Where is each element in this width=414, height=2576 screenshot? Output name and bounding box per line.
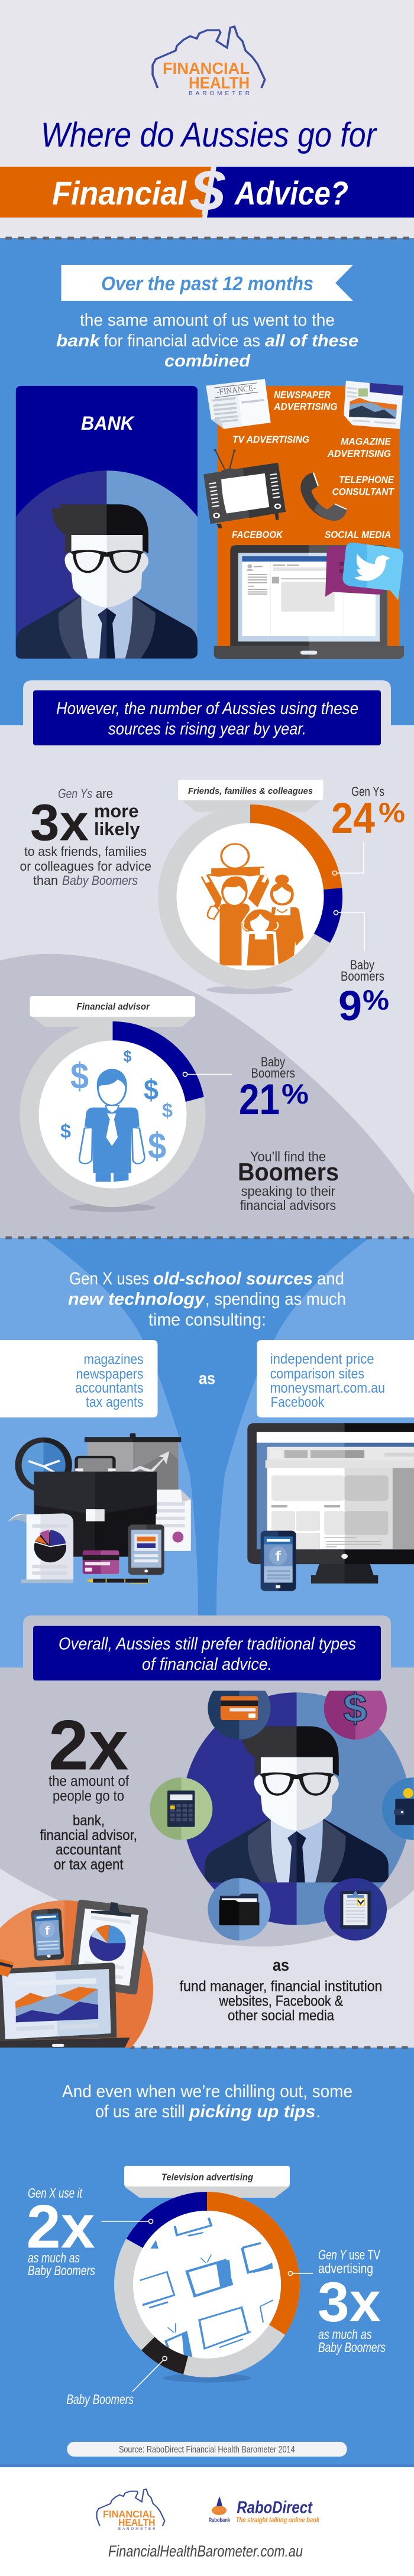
text: Gen X statement: new technology (68, 1290, 205, 1309)
ribbon: over the past 12 months: Over the past 12 months (101, 272, 313, 294)
text: 2x traditional sources: people go to (53, 1787, 124, 1804)
text: Gen Ys 3x more likely: more (94, 801, 138, 822)
label: Baby Boomers 21 percent (183, 1055, 309, 1124)
icon: advisor with dollar signs: $ (144, 1075, 159, 1106)
label: Baby Boomers 9 percent: 9 (338, 983, 362, 1030)
text: Gen X statement: and (317, 1269, 344, 1289)
label: Gen Y 3x: Baby Boomers (318, 2340, 386, 2355)
icon: advisor with dollar signs (60, 1047, 173, 1182)
panel: new technology sources list: Facebook (271, 1394, 325, 1410)
label: Gen Ys 24 percent: % (379, 797, 405, 828)
footer logo: RaboDirect: Rabobank (209, 2517, 230, 2524)
text: 2x traditional sources: or tax agent (54, 1856, 124, 1873)
text: same amount statement: the same amount of us went to the (80, 311, 335, 330)
panel: bank: BANK (81, 413, 135, 434)
text: Gen X statement (68, 1269, 346, 1330)
panel: old-school sources list: accountants (75, 1380, 143, 1396)
illustration: monitor and phone: f (275, 1549, 281, 1564)
label: Baby Boomers 21 percent: 21 (239, 1076, 280, 1124)
labels: source names: FACEBOOK (232, 529, 284, 540)
text: Gen Ys 3x more likely: or colleagues for advice (20, 859, 151, 874)
text: same amount statement: combined (164, 352, 251, 371)
text: Gen X statement: old-school sources (153, 1269, 313, 1289)
panel: old-school sources list: newspapers (76, 1367, 143, 1382)
icon: social media speech bubbles (325, 543, 403, 601)
text: 2x traditional sources: bank, (73, 1812, 105, 1829)
text: Boomers speaking to advisors: Boomers (238, 1158, 339, 1186)
text: 2x traditional sources: the amount of (48, 1773, 129, 1789)
icon: phone (31, 1909, 64, 1961)
labels: source names (232, 390, 394, 540)
background: light generations section (0, 725, 414, 1238)
text: as fund manager and social media (180, 1956, 382, 2024)
callout: rising year by year (23, 680, 391, 745)
text: Gen Ys 3x more likely: than (33, 873, 58, 888)
panel: new technology sources list: moneysmart.com.au (270, 1380, 385, 1396)
label: Gen Y 3x (288, 2247, 386, 2355)
label: Gen Y 3x: advertising (318, 2260, 373, 2276)
text: picking up tips: . (316, 2102, 321, 2121)
text: picking up tips (62, 2082, 352, 2121)
title: Where do Aussies go for (41, 116, 377, 154)
icon: folder (208, 1878, 271, 1941)
labels: source names: NEWSPAPER (274, 390, 331, 401)
labels: source names: TELEPHONE (339, 474, 394, 485)
panel: new technology sources list (257, 1340, 414, 1417)
text: as: as (199, 1369, 215, 1388)
label: Gen Y 3x: as much as (318, 2327, 372, 2342)
text: Boomers speaking to advisors: financial advisors (240, 1198, 336, 1213)
labels: source names: ADVERTISING (273, 401, 337, 413)
label: Baby Boomers (66, 2356, 167, 2407)
icon: laptop (214, 545, 404, 659)
background: traditional advice section (0, 1667, 414, 2048)
banner: Financial $ Advice? (0, 158, 414, 223)
label: Baby Boomers 9 percent: Baby (350, 958, 374, 972)
chart: friends, families and colleagues donut: Friends, families & colleagues (188, 786, 313, 796)
chart: television advertising donut: Television advertising (161, 2173, 253, 2183)
panel: old-school sources list: magazines (84, 1351, 143, 1368)
label: Baby Boomers 9 percent: Boomers (341, 969, 384, 984)
icon: clipboard (324, 1878, 387, 1941)
logo: Financial Health Barometer (153, 27, 265, 97)
callout: rising year by year: sources is rising year by year. (108, 720, 306, 739)
background: blue bank section (0, 238, 414, 725)
label: Baby Boomers 21 percent: Boomers (251, 1066, 295, 1081)
icon: newspaper (206, 379, 271, 429)
text: Gen Ys 3x more likely: Baby Boomers (62, 873, 138, 888)
icon: dollar coin: $ (343, 1686, 367, 1731)
icon: advisor with dollar signs: $ (70, 1056, 89, 1097)
text: 2x traditional sources: 2x (48, 1706, 128, 1785)
labels: source names: TV ADVERTISING (232, 434, 309, 445)
label: Gen X 2x: Baby Boomers (28, 2263, 95, 2278)
background: header (0, 0, 414, 238)
text: Boomers speaking to advisors: speaking to their (241, 1183, 335, 1199)
text: same amount statement (56, 311, 358, 371)
callout: rising year by year: However, the number of Aussies using these (56, 699, 358, 718)
label: Gen Ys 24 percent: 24 (331, 794, 375, 842)
icon: television sets (140, 2218, 273, 2367)
background: television section (0, 2048, 414, 2467)
icon: advisor with dollar signs: $ (60, 1120, 71, 1142)
label: Baby Boomers 21 percent: Baby (261, 1055, 285, 1069)
text: same amount statement: all of these (265, 332, 358, 351)
chart: financial advisor donut: Financial advisor (77, 1002, 150, 1012)
background: lower light curve (0, 1868, 414, 2048)
label: Gen X 2x: Gen X use it (28, 2185, 83, 2201)
background: funnel (44, 1238, 370, 1615)
panel: other sources (203, 379, 404, 659)
source note (67, 2442, 347, 2457)
icon: advisor with dollar signs: $ (162, 1099, 173, 1121)
footer URL: FinancialHealthBarometer.com.au (108, 2542, 303, 2560)
logo: Financial Health Barometer: BAROMETER (189, 90, 250, 97)
text: picking up tips: And even when we’re chilling out, some (62, 2082, 352, 2101)
label: Gen Y 3x: 3x (318, 2271, 381, 2334)
footer logo: Financial Health Barometer (97, 2489, 164, 2531)
text: 2x traditional sources: accountant (56, 1842, 121, 1858)
chart: friends, families and colleagues donut (158, 780, 342, 994)
label: Gen X 2x (27, 2185, 153, 2278)
banner: Financial $ Advice?: $ (190, 158, 226, 223)
labels: source names: SOCIAL MEDIA (325, 529, 391, 540)
footer logo: RaboDirect (209, 2496, 320, 2524)
icon: magazine (344, 381, 403, 429)
text: as fund manager and social media: as (273, 1956, 289, 1975)
label: Gen X 2x: as much as (28, 2250, 80, 2265)
icon: telephone (300, 473, 347, 521)
icon: dollar coin (324, 1691, 387, 1740)
text: Boomers speaking to advisors: You’ll find the (250, 1149, 326, 1164)
background: footer (0, 2467, 414, 2576)
text: Gen X statement: time consulting: (148, 1310, 266, 1330)
footer logo: RaboDirect: RaboDirect (237, 2499, 313, 2517)
label: Baby Boomers 21 percent: % (282, 1078, 309, 1109)
label: Gen Ys 24 percent (331, 784, 405, 875)
illustration: adviser with finance icons (150, 1677, 414, 1941)
footer logo: RaboDirect: The straight talking online bank (236, 2516, 320, 2524)
panel: new technology sources list: independent price (270, 1351, 374, 1367)
ribbon: over the past 12 months (62, 265, 353, 301)
text: as fund manager and social media: websites, Facebook & (219, 1993, 343, 2010)
icon: television (203, 449, 286, 528)
icon: credit card (208, 1691, 271, 1740)
text: Gen X statement: Gen X uses (69, 1269, 149, 1289)
logo: Financial Health Barometer: HEALTH (189, 73, 250, 92)
icon: clipboard with pie chart (69, 1900, 148, 1994)
text: Gen Ys 3x more likely: 3x (30, 794, 89, 852)
text: Gen Ys 3x more likely: Gen Ys (58, 786, 92, 801)
icon: family (200, 844, 303, 965)
label: Baby Boomers 9 percent (334, 910, 389, 1030)
text: picking up tips: picking up tips (189, 2102, 316, 2121)
icon: wallet (382, 1777, 414, 1840)
text: Gen X statement: , spending as much (205, 1290, 346, 1309)
illustration: monitor and phone (247, 1423, 414, 1591)
panel: old-school sources list: tax agents (86, 1394, 143, 1410)
icon: calculator (150, 1777, 212, 1840)
footer logo: Financial Health Barometer: BAROMETER (118, 2528, 156, 2531)
source note: Source: RaboDirect Financial Health Barometer 2014 (119, 2445, 295, 2455)
text: Gen Ys 3x more likely: to ask friends, families (24, 844, 147, 859)
panel: bank (15, 385, 198, 658)
text: as fund manager and social media: fund manager, financial institution (180, 1978, 382, 1995)
text: 2x traditional sources: financial advisor, (40, 1827, 137, 1844)
label: Baby Boomers: Baby Boomers (66, 2392, 134, 2407)
text: Gen Ys 3x more likely: are (96, 786, 113, 801)
illustration: orange circle with devices (0, 1900, 153, 2048)
labels: source names: ADVERTISING (327, 448, 391, 459)
text: as fund manager and social media: other social media (228, 2007, 334, 2024)
icon: laptop with area chart (0, 1958, 130, 2049)
icon: phone: f (45, 1924, 50, 1937)
text: same amount statement: for financial advice as (104, 332, 260, 351)
banner: Financial $ Advice?: Financial (52, 174, 187, 212)
text: Gen Ys 3x more likely: likely (94, 819, 140, 839)
callout: prefer traditional advice: of financial advice. (142, 1655, 272, 1674)
banner: Financial $ Advice?: Advice? (234, 174, 348, 212)
text: Gen Ys 3x more likely (20, 786, 151, 888)
callout: prefer traditional advice (23, 1615, 391, 1680)
label: Gen Y 3x: Gen Y use TV (318, 2247, 380, 2263)
label: Gen Ys 24 percent: Gen Ys (351, 784, 384, 799)
illustration: briefcase, clock and documents (8, 1433, 191, 1584)
text: picking up tips: of us are still (95, 2102, 185, 2121)
labels: source names: CONSULTANT (332, 486, 394, 498)
label: Baby Boomers 9 percent: % (363, 984, 389, 1016)
footer logo: Financial Health Barometer: FINANCIAL (103, 2509, 155, 2520)
text: Boomers speaking to advisors (238, 1149, 339, 1213)
label: Gen X 2x: 2x (27, 2193, 95, 2262)
background: Gen X section (0, 1238, 414, 1667)
text: 2x traditional sources (40, 1706, 137, 1873)
icon: advisor with dollar signs: $ (148, 1126, 166, 1167)
text: same amount statement: bank (56, 332, 101, 351)
logo: Financial Health Barometer: FINANCIAL (163, 59, 250, 77)
panel: old-school sources list (0, 1340, 157, 1417)
chart: television advertising donut (114, 2166, 300, 2382)
callout: prefer traditional advice: Overall, Aussies still prefer traditional types (59, 1635, 356, 1654)
icon: newspaper: -FINANCE- (216, 384, 257, 397)
background: grey wave (0, 954, 414, 1238)
footer logo: Financial Health Barometer: HEALTH (118, 2517, 155, 2528)
chart: financial advisor donut (20, 996, 206, 1212)
icon: advisor with dollar signs: $ (123, 1047, 131, 1065)
labels: source names: MAGAZINE (341, 436, 392, 447)
panel: new technology sources list: comparison sites (270, 1366, 364, 1382)
